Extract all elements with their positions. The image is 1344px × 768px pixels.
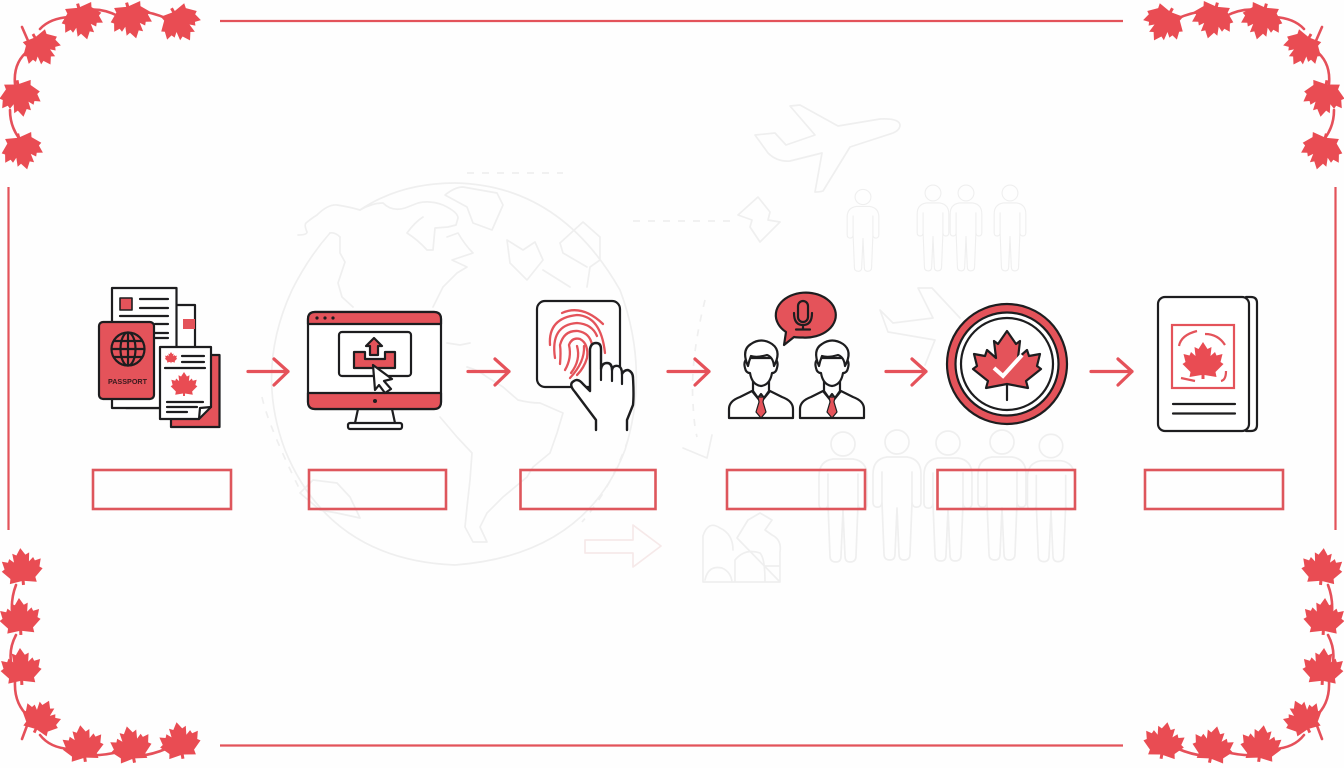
- label box: step 2: [309, 470, 446, 509]
- icon: passport and documents: [99, 288, 220, 427]
- maple vine: bottom right corner: [1141, 546, 1344, 767]
- icon: online upload on monitor: [308, 312, 441, 429]
- background: small people group: [847, 185, 1026, 271]
- maple vine: top left corner: [0, 0, 208, 175]
- label box: step 1: [93, 470, 231, 509]
- frame: top rule: [220, 20, 1123, 22]
- interviewee left: [729, 340, 793, 418]
- label box: step 4: [727, 470, 865, 509]
- label box: step 3: [520, 470, 656, 509]
- maple leaf stamp: [1172, 325, 1234, 388]
- globe: north america outline: [298, 202, 473, 307]
- interviewer right: [800, 340, 864, 418]
- globe: greenland outline: [445, 187, 503, 230]
- icon: fingerprint scan: [537, 301, 634, 430]
- globe: small island outline: [300, 343, 470, 518]
- frame: bottom rule: [220, 744, 1123, 747]
- passport booklet: PASSPORT: [108, 377, 148, 386]
- background: rotating arrows: [738, 197, 780, 242]
- icon: approval seal with maple leaf: [947, 304, 1067, 424]
- maple vine: top right corner: [1136, 0, 1344, 175]
- fingerprint ridges: [550, 310, 605, 378]
- label box: step 6: [1145, 470, 1283, 509]
- globe: europe outline: [507, 222, 600, 287]
- background: landmark buildings: [703, 513, 780, 582]
- arrow: step 2 to 3: [468, 359, 509, 385]
- background: dashed route lines: [262, 173, 735, 522]
- speech bubble with microphone: [776, 293, 836, 345]
- arrow: step 3 to 4: [668, 359, 709, 385]
- frame: left rule: [7, 187, 10, 530]
- icon: canadian passport with stamp: [1158, 297, 1257, 431]
- icon: interview with microphone bubble: [729, 293, 864, 418]
- pointing hand: [571, 343, 634, 430]
- globe: south america outline: [440, 367, 563, 542]
- frame: right rule: [1334, 187, 1337, 530]
- arrow: step 4 to 5: [886, 359, 926, 385]
- arrow: step 5 to 6: [1091, 359, 1132, 385]
- background: large people group: [819, 430, 1075, 562]
- background: world globe watermark: [272, 183, 636, 565]
- arrow: step 1 to 2: [248, 359, 288, 385]
- background: second airplane: [880, 288, 960, 365]
- label box: step 5: [938, 470, 1075, 509]
- background: large airplane: [755, 105, 900, 192]
- maple vine: bottom left corner: [0, 546, 203, 767]
- background: outlined arrow: [585, 525, 661, 567]
- canadian document: [160, 347, 211, 419]
